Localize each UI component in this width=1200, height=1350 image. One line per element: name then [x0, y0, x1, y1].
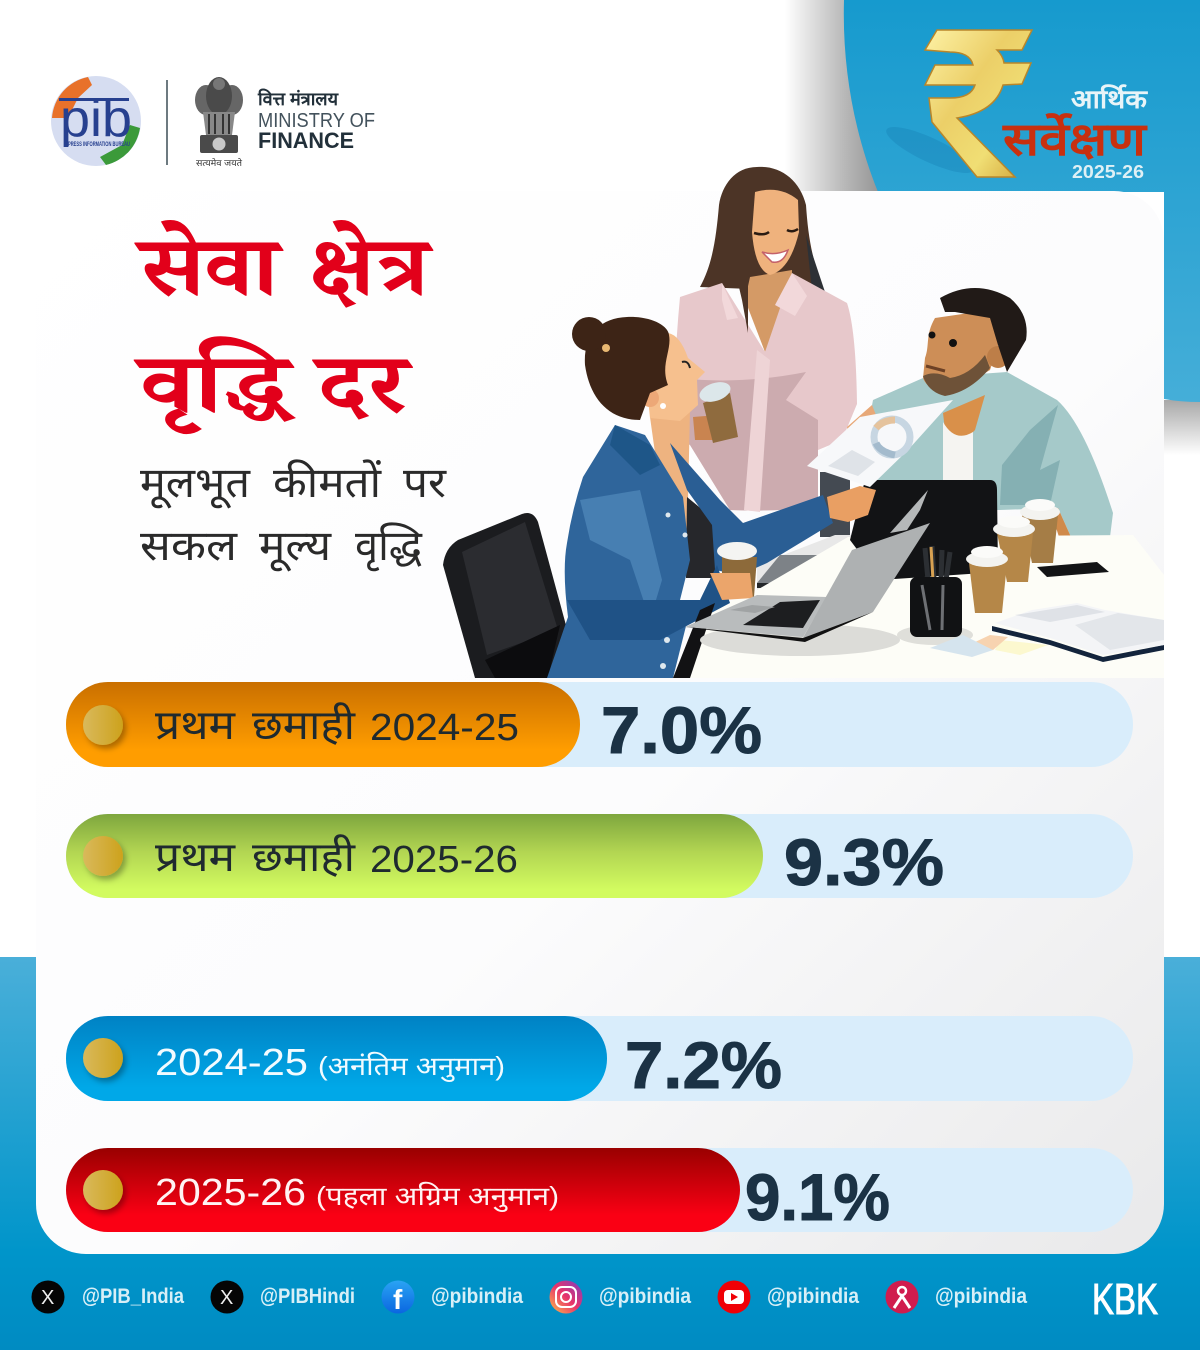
ministry name: MINISTRY OF	[258, 110, 375, 132]
economic survey logo: 2025-26	[1072, 162, 1144, 182]
footer social handles	[32, 1280, 1027, 1315]
main white panel	[36, 191, 1164, 1254]
handle: @PIBHindi	[260, 1285, 355, 1308]
icon: Instagram	[550, 1280, 582, 1314]
pen holder	[897, 546, 973, 645]
subtitle: पर	[403, 459, 447, 506]
coffee cups	[966, 499, 1060, 613]
bar label	[155, 1042, 505, 1084]
title	[133, 217, 434, 465]
subtitle	[140, 459, 447, 572]
seated woman	[547, 317, 833, 678]
background: top right blue	[785, 0, 1200, 455]
icon: X	[32, 1280, 64, 1314]
illustration: office colleagues	[443, 167, 1164, 678]
bar label: 2025-26	[155, 1172, 306, 1214]
subtitle: वृद्धि	[355, 522, 422, 572]
handle: @pibindia	[767, 1285, 859, 1308]
title: क्षेत्र	[308, 217, 434, 348]
back laptop	[757, 472, 851, 590]
document with chart	[807, 400, 953, 487]
subtitle: सकल	[140, 522, 239, 569]
bar: first half 2025-26	[66, 814, 1133, 899]
logo: national emblem: सत्यमेव जयते	[196, 157, 243, 168]
value: 9.1%	[745, 1160, 890, 1234]
icon: Facebook	[382, 1280, 414, 1315]
bar label: 2025-26	[370, 839, 518, 881]
icon: X: X	[41, 1287, 54, 1309]
sticky notes	[930, 635, 1048, 657]
marker dot	[83, 705, 123, 745]
handle: @PIB_India	[82, 1285, 184, 1308]
subtitle: कीमतों	[273, 459, 382, 506]
handle: @pibindia	[935, 1285, 1027, 1308]
bar label: (अनंतिम अनुमान)	[318, 1051, 505, 1082]
KBK credit: KBK	[1092, 1275, 1158, 1324]
bar label	[155, 702, 519, 749]
logo: PIB: pib	[60, 90, 132, 148]
bar label: 2024-25	[370, 707, 519, 749]
handle: @pibindia	[599, 1285, 691, 1308]
ministry name: FINANCE	[258, 128, 354, 153]
ministry name	[257, 88, 375, 153]
icon: gold rupee	[925, 30, 1032, 177]
value: 7.0%	[601, 693, 762, 767]
bar label: छमाही	[252, 834, 356, 880]
marker dot	[83, 836, 123, 876]
logo: PIB: PRESS INFORMATION BUREAU	[68, 142, 130, 148]
icon: Facebook: f	[393, 1284, 403, 1315]
marker dot	[83, 1038, 123, 1078]
bar label	[155, 1172, 559, 1214]
icon: Koo style	[886, 1280, 918, 1314]
icon: X	[210, 1280, 244, 1314]
coffee held by standing woman	[693, 378, 738, 443]
bar label	[155, 834, 518, 881]
title: वृद्धि	[133, 334, 297, 465]
bar label: (पहला अग्रिम अनुमान)	[316, 1181, 559, 1212]
hand holding document	[827, 486, 876, 522]
bar label: प्रथम	[155, 702, 237, 748]
handle: @pibindia	[431, 1285, 523, 1308]
bar: 2024-25 provisional estimate	[66, 1016, 1133, 1102]
value: 7.2%	[625, 1028, 782, 1102]
table back laptop	[850, 480, 998, 580]
divider	[166, 80, 168, 165]
bar label: प्रथम	[155, 834, 237, 880]
logo: PIB	[51, 76, 141, 166]
icon: X: X	[220, 1287, 233, 1309]
ministry name: वित्त मंत्रालय	[257, 88, 340, 109]
title: सेवा	[133, 217, 284, 348]
icon: YouTube	[718, 1280, 750, 1314]
title: दर	[311, 334, 413, 465]
man	[860, 288, 1113, 546]
economic survey logo: सर्वेक्षण	[1002, 113, 1148, 165]
economic survey logo: आर्थिक	[1071, 84, 1148, 114]
bar label: 2024-25	[155, 1042, 308, 1084]
chair	[443, 513, 570, 678]
bar: 2025-26 first advance estimate	[66, 1148, 1133, 1234]
standing woman	[673, 167, 857, 512]
bar label: छमाही	[252, 702, 356, 748]
open book	[992, 603, 1164, 662]
bar: first half 2024-25	[66, 682, 1133, 767]
subtitle: मूलभूत	[140, 459, 251, 509]
marker dot	[83, 1170, 123, 1210]
front laptop	[685, 523, 930, 656]
logo: national emblem	[195, 77, 243, 168]
subtitle: मूल्य	[259, 522, 332, 572]
economic survey logo	[881, 30, 1148, 182]
value: 9.3%	[784, 825, 944, 899]
phone	[1037, 562, 1109, 577]
background: bottom blue	[0, 957, 1200, 1350]
table	[757, 535, 1164, 678]
